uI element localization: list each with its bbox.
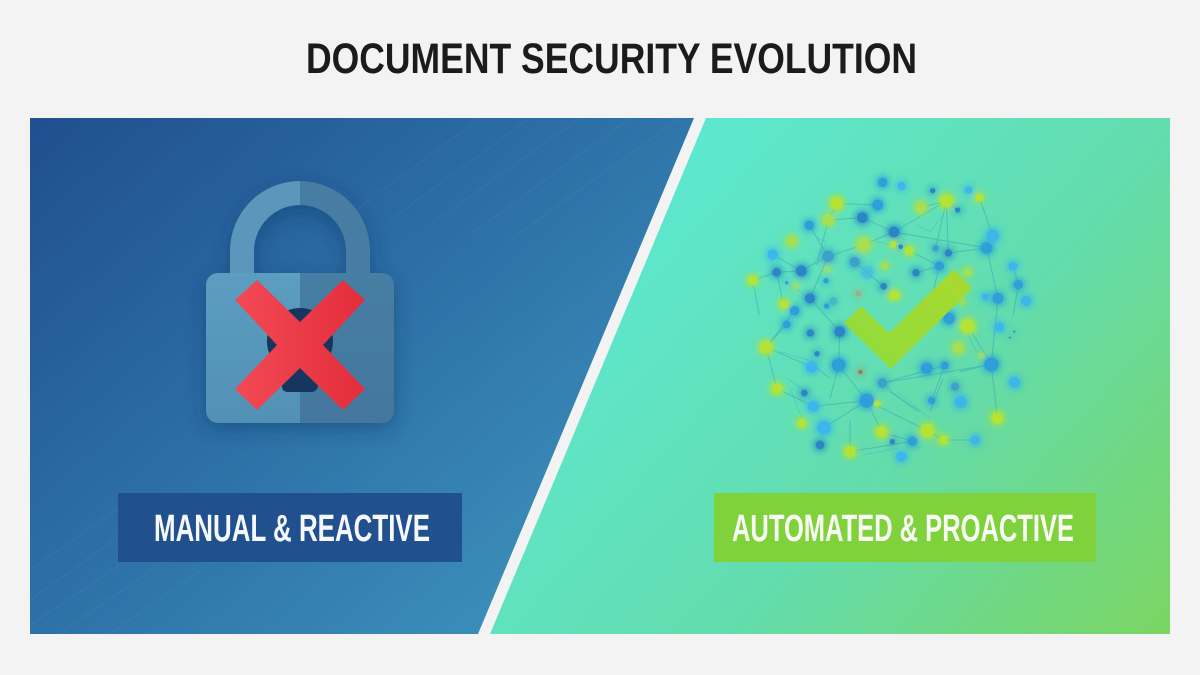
network sphere (748, 178, 1031, 462)
icon: green check mark (844, 269, 972, 369)
red cross (235, 280, 365, 410)
label: automated and proactive (714, 493, 1096, 562)
panel: manual and reactive (30, 118, 694, 634)
panel: automated and proactive (490, 118, 1170, 634)
title: DOCUMENT SECURITY EVOLUTION (306, 35, 917, 83)
icon: crossed-out padlock (206, 181, 394, 423)
label: manual and reactive (118, 493, 462, 562)
label: manual and reactive: MANUAL & REACTIVE (154, 508, 430, 550)
padlock (206, 181, 394, 423)
